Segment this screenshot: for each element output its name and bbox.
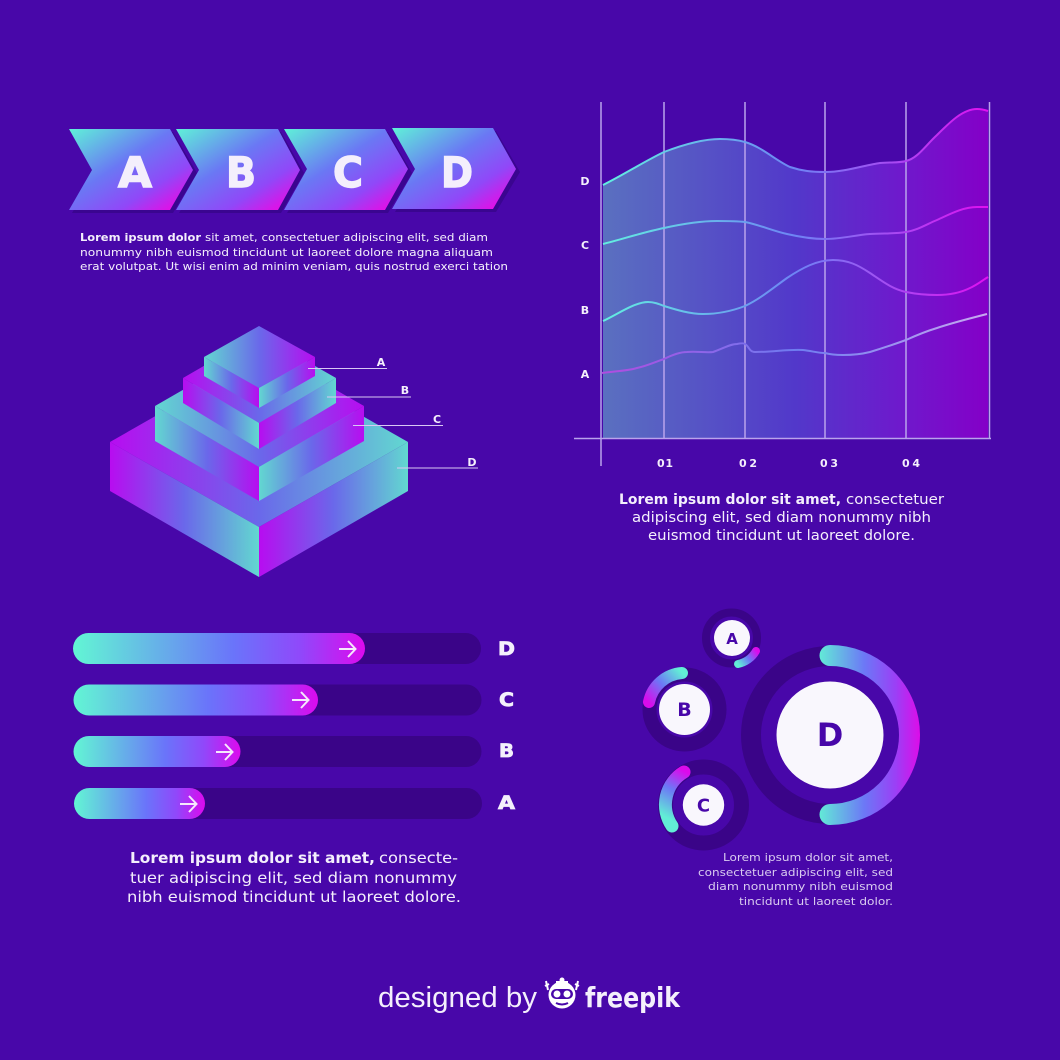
bar B — [74, 736, 514, 767]
text block: chevron description: sit amet, consectetuer adipiscing elit, sed diam — [205, 231, 488, 244]
pyramid label D: D — [467, 456, 477, 469]
chevron process: A B C D: C — [333, 148, 363, 197]
radial D — [751, 656, 910, 814]
text block: chevron description: Lorem ipsum dolor — [80, 231, 202, 244]
text block: bars description: consecte- — [379, 849, 458, 867]
radial C: C — [697, 796, 710, 816]
pyramid label B — [327, 384, 411, 397]
text block: bars description: nibh euismod tincidunt ut laoreet dolore. — [127, 888, 461, 906]
pyramid label A: A — [377, 356, 386, 369]
series B line — [603, 260, 988, 321]
radial chart group — [649, 612, 910, 843]
bar A: A — [498, 792, 515, 814]
text block: chevron description — [80, 231, 508, 273]
pyramid label B: B — [401, 384, 409, 397]
pyramid label C: C — [433, 413, 441, 426]
text block: chevron description: nonummy nibh euismod tincidunt ut laoreet dolore magna aliquam — [80, 246, 493, 259]
y axis labels: D — [580, 175, 590, 188]
text block: radial description — [698, 852, 893, 908]
x axis labels: 01 — [657, 457, 673, 470]
text block: chart description — [619, 492, 944, 544]
text block: chevron description: erat volutpat. Ut wisi enim ad minim veniam, quis nostrud exerci tation — [80, 260, 508, 273]
y axis labels: B — [581, 304, 589, 317]
chevron process: A B C D: B — [226, 148, 256, 197]
text block: chart description: adipiscing elit, sed diam nonummy nibh — [632, 510, 931, 526]
chevron process: A B C D: A — [118, 148, 153, 197]
text block: chart description: euismod tincidunt ut laoreet dolore. — [648, 528, 915, 544]
progress bars — [73, 633, 515, 819]
line and area chart — [574, 102, 991, 470]
chevron process: A B C D: D — [441, 148, 473, 197]
text block: bars description: Lorem ipsum dolor sit amet, — [130, 849, 375, 867]
radial A — [706, 612, 757, 664]
bar B: B — [499, 740, 514, 762]
text block: bars description — [127, 849, 461, 906]
footer credit: designed by — [378, 982, 538, 1014]
text block: radial description: consectetuer adipiscing elit, sed — [698, 867, 893, 879]
text block: radial description: diam nonummy nibh euismod — [708, 881, 893, 893]
series D line — [603, 109, 988, 185]
pyramid label C — [353, 413, 443, 426]
text block: radial description: tincidunt ut laoreet dolor. — [739, 896, 893, 908]
bar D: D — [498, 638, 515, 660]
bar D — [73, 633, 515, 664]
radial B: B — [677, 699, 692, 721]
y axis labels: A — [581, 368, 590, 381]
bar A — [74, 788, 515, 819]
text block: bars description: tuer adipiscing elit, sed diam nonummy — [130, 869, 457, 887]
pyramid label D — [397, 456, 478, 469]
radial C — [665, 767, 742, 843]
isometric pyramid chart — [110, 326, 478, 577]
series C line — [603, 207, 988, 244]
text block: radial description: Lorem ipsum dolor sit amet, — [723, 852, 893, 864]
radial D: D — [817, 716, 843, 754]
y axis labels — [580, 175, 590, 381]
bar C: C — [499, 689, 514, 711]
footer credit — [378, 978, 681, 1014]
icon: freepik mascot — [545, 978, 579, 1008]
radial B — [649, 673, 720, 744]
pyramid label A — [308, 356, 387, 369]
x axis labels: 02 — [739, 457, 757, 470]
x axis labels: 04 — [902, 457, 920, 470]
x axis labels: 03 — [820, 457, 838, 470]
radial A: A — [726, 630, 738, 648]
footer credit: freepik — [585, 981, 681, 1014]
x axis labels — [657, 457, 920, 470]
chevron process: A B C D — [69, 128, 520, 213]
bar C — [74, 684, 514, 716]
series A line — [602, 314, 987, 373]
y axis labels: C — [581, 239, 589, 252]
text block: chart description: Lorem ipsum dolor sit amet, — [619, 492, 841, 508]
text block: chart description: consectetuer — [846, 492, 944, 508]
